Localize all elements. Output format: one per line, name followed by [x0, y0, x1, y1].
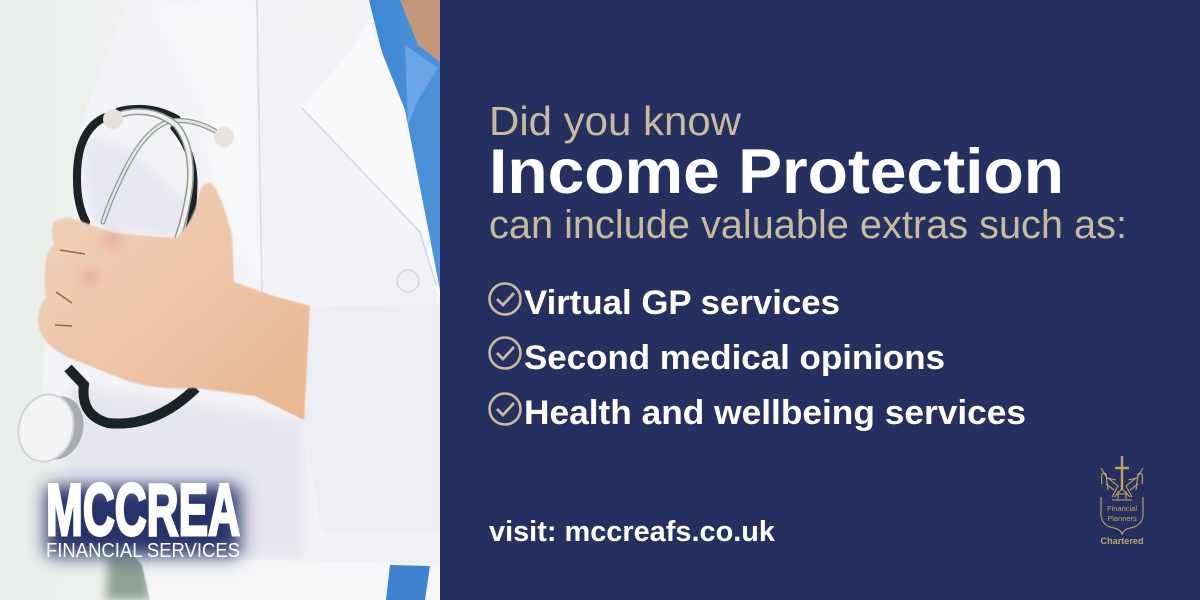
heading: Did you know: Did you know	[489, 98, 741, 144]
icon: stethoscope upper tubes	[77, 107, 234, 237]
icon: Chartered Financial Planners crest	[1100, 456, 1144, 547]
heading: can include valuable extras: can include valuable extras such as:	[489, 203, 1127, 247]
icon: Chartered Financial Planners crest: Chartered	[1100, 536, 1144, 547]
icon: finger gaps	[55, 250, 85, 326]
icon: hand and forearm	[38, 183, 310, 420]
list item: Health and wellbeing services: Health and wellbeing services	[524, 394, 1026, 432]
heading: Income Protection: Income Protection	[489, 137, 1064, 207]
panel: doctor photo	[0, 0, 440, 600]
panel: navy background	[440, 0, 1200, 600]
list item: Second medical opinions: Second medical opinions	[524, 339, 945, 377]
logo backing glow	[46, 486, 240, 556]
icon: Chartered Financial Planners crest: Financial	[1107, 504, 1137, 513]
website link text: visit: mccreafs.co.uk	[489, 516, 776, 548]
icon: stethoscope lower tube and chest piece	[11, 368, 196, 468]
icon: knuckle blush	[81, 232, 121, 286]
icon: coat button	[397, 270, 419, 292]
icon: scrubs hem	[386, 565, 430, 600]
logo: MCCREA Financial Services	[48, 482, 240, 557]
logo: MCCREA Financial Services: FINANCIAL SERVICES	[46, 539, 240, 562]
logo: MCCREA Financial Services: MCCREA	[46, 470, 240, 551]
list item: Virtual GP services: Virtual GP services	[524, 284, 840, 322]
icon: Chartered Financial Planners crest: Planners	[1107, 514, 1137, 523]
